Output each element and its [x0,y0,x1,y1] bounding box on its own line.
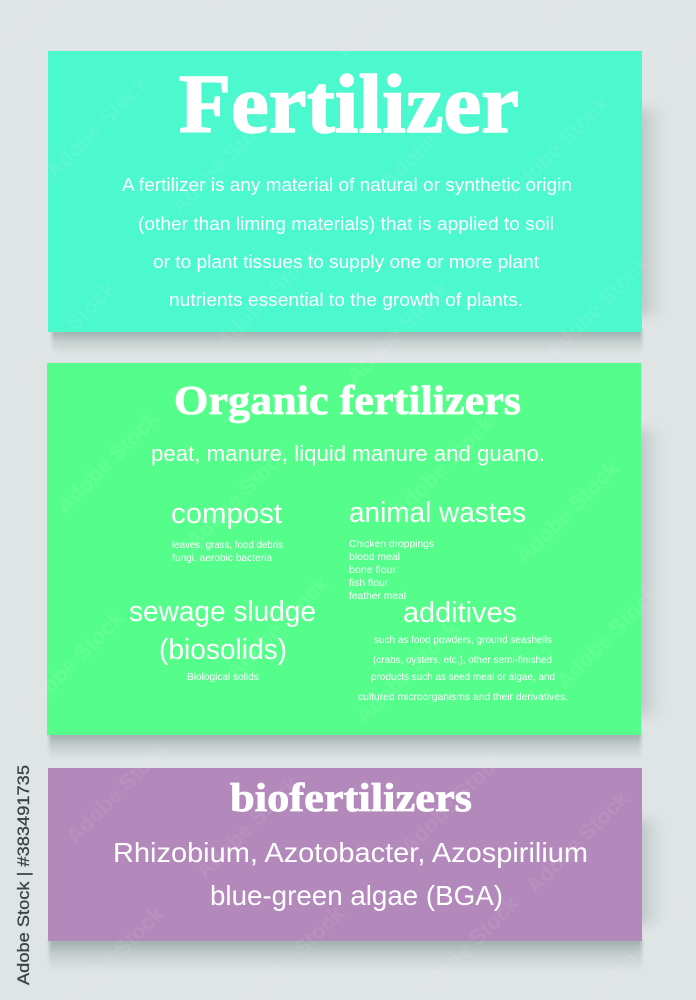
watermarks: Adobe Stock [376,80,489,194]
animal wastes: feather meal [349,590,406,602]
watermarks: Adobe Stock [51,405,164,519]
animal wastes: animal wastes [349,497,526,529]
panel: biofertilizers [48,768,642,941]
watermarks: Adobe Stock [166,105,279,219]
organisms text: Rhizobium, Azotobacter, Azospirilium [113,837,588,868]
definition text: or to plant tissues to supply one or more plant [153,252,539,272]
organisms text [113,837,588,911]
stock id label: Adobe Stock | #383491735 [14,765,33,985]
watermarks: Adobe Stock [521,785,634,899]
organisms text: blue-green algae (BGA) [210,880,503,911]
watermarks: Adobe Stock [511,455,624,569]
sewage sludge: (biosolids) [159,634,287,666]
animal wastes: blood meal [349,551,400,563]
watermarks: Adobe Stock [541,250,654,364]
panel: fertilizer definition [48,51,642,332]
sewage sludge: sewage sludge [129,596,316,628]
intro text: peat, manure, liquid manure and guano. [151,441,545,466]
panel shadows [49,110,666,971]
watermarks: Adobe Stock [351,615,464,729]
watermarks: Adobe Stock [341,275,454,389]
additives [358,597,568,703]
additives: products such as seed meal or algae, and [371,671,555,683]
compost: fungi, aerobic bacteria [172,552,272,564]
watermarks: Adobe Stock [501,90,614,204]
additives: (crabs, oysters, etc.), other semi-finished [373,654,552,666]
animal wastes [349,497,526,602]
additives: additives [403,597,517,629]
title: Fertilizer [179,58,519,151]
watermarks: Adobe Stock [16,605,129,719]
animal wastes: fish flour [349,577,388,589]
sewage sludge [129,596,316,683]
watermarks: Adobe Stock [41,70,154,184]
watermarks: Adobe Stock [211,240,324,354]
heading: Organic fertilizers [174,377,521,423]
additives: cultured microorganisms and their derivatives. [358,691,568,703]
definition text [122,175,572,310]
watermarks: Adobe Stock [386,410,499,524]
watermarks: Adobe Stock [191,770,304,884]
compost: compost [171,498,282,530]
compost [171,498,283,564]
watermarks: Adobe Stock [181,440,294,554]
animal wastes: Chicken droppings [349,538,434,550]
watermarks: Adobe Stock [221,570,334,684]
watermarks: Adobe Stock [61,735,174,849]
compost: leaves, grass, food debris [172,539,283,551]
definition text: A fertilizer is any material of natural or synthetic origin [122,175,572,195]
definition text: (other than liming materials) that is applied to soil [138,214,554,234]
additives: such as food powders, ground seashells [374,634,552,646]
watermarks: Adobe Stock [551,580,664,694]
definition text: nutrients essential to the growth of plants. [169,290,523,310]
sewage sludge: Biological solids [187,671,259,683]
heading: biofertilizers [230,775,472,820]
panel: organic fertilizers [47,363,641,735]
watermarks: Adobe Stock [8,275,121,389]
animal wastes: bone flour [349,564,397,576]
watermarks: Adobe Stock [396,745,509,859]
